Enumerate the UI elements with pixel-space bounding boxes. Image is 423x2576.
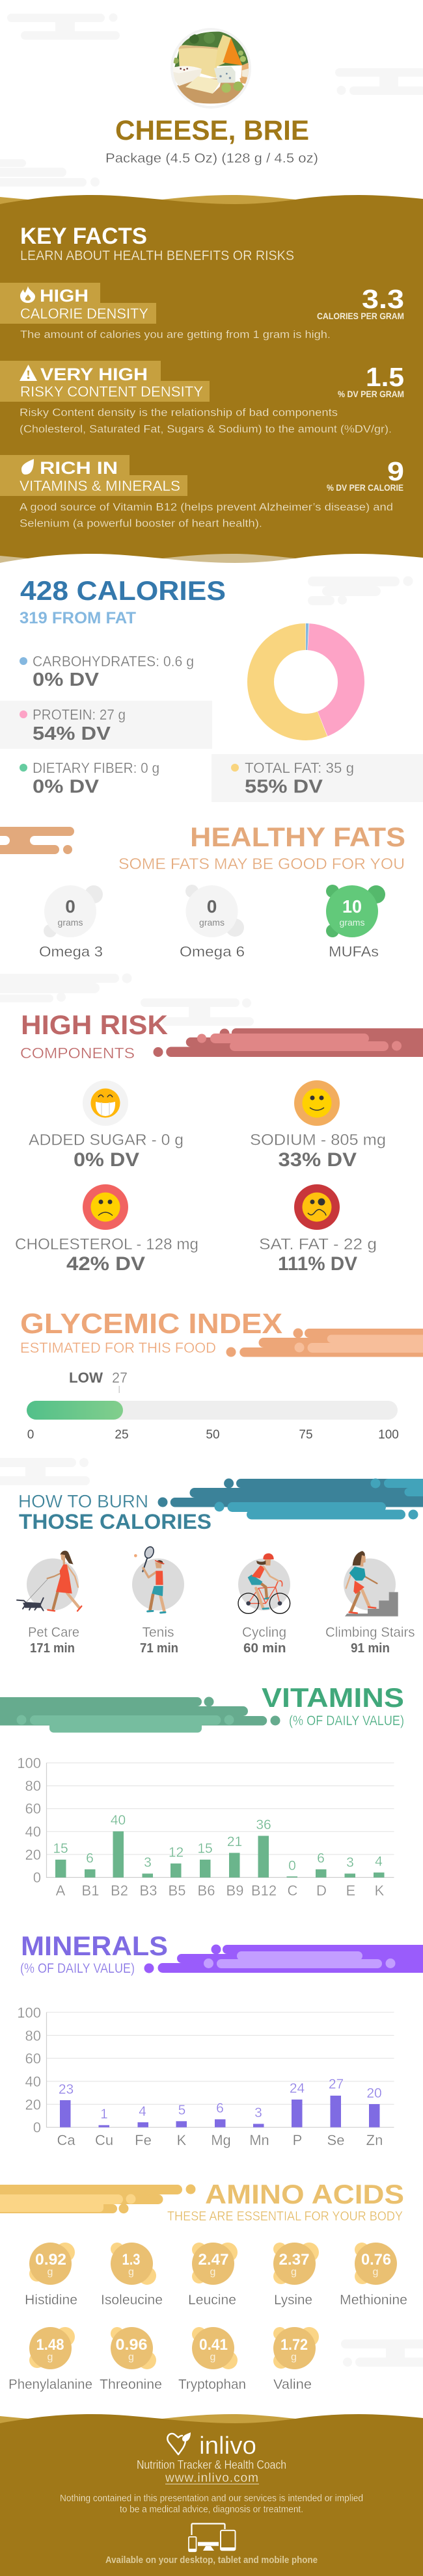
icon: flame	[20, 286, 35, 303]
amino: isoleucine	[101, 2243, 163, 2308]
amino: threonine: 0.96	[116, 2336, 147, 2354]
fact: vitamins and minerals	[0, 455, 404, 529]
fact: vitamins and minerals: RICH IN	[40, 458, 118, 478]
macro: total fat	[212, 754, 423, 802]
gauge scale labels: 0	[27, 1428, 34, 1442]
component: sodium: SODIUM - 805 mg	[250, 1131, 386, 1149]
food photo: cheese platter	[171, 28, 252, 111]
panel: key facts	[0, 195, 423, 572]
title: CHEESE, BRIE	[115, 115, 309, 146]
background cloud: amino	[341, 2339, 423, 2367]
amino: histidine: 0.92	[35, 2251, 66, 2269]
amino: phenylalanine: 1.48	[36, 2336, 64, 2354]
bar chart: vitamins: 60	[25, 1801, 41, 1817]
bar chart: vitamins: B3	[140, 1882, 157, 1899]
decoration: vitamins bars	[0, 1697, 280, 1733]
bar chart: minerals: Fe	[135, 2132, 152, 2148]
amino: valine: Valine	[273, 2377, 312, 2392]
amino: isoleucine: 1.3	[122, 2251, 141, 2269]
amino: lysine	[273, 2243, 319, 2308]
gauge value: low 27	[69, 1370, 128, 1393]
amino: leucine: 2.47	[198, 2251, 229, 2269]
amino: methionine: Methionine	[340, 2293, 407, 2308]
gauge value: low 27: 27	[112, 1370, 128, 1386]
activity: climbing stairs: Climbing Stairs	[325, 1625, 415, 1640]
bubble: MUFAs: 10	[342, 896, 362, 917]
fact: calorie density: CALORIES PER GRAM	[317, 311, 404, 321]
icon: leaf	[21, 459, 34, 475]
bar chart: minerals: 5	[178, 2103, 185, 2118]
macro: total fat: TOTAL FAT: 35 g	[245, 760, 354, 776]
macro: carbohydrates	[20, 653, 194, 690]
disclaimer	[60, 2493, 363, 2515]
bar chart: minerals: 4	[139, 2104, 146, 2119]
amino: valine: g	[291, 2352, 297, 2363]
bar chart: vitamins: 0	[288, 1858, 296, 1873]
decoration: amino bars	[0, 2184, 195, 2213]
decoration: burn bars	[157, 1478, 423, 1520]
bar chart: minerals: P	[293, 2132, 302, 2148]
fact: risky content density: 1.5	[366, 362, 404, 392]
subheading: vitamins: (% OF DAILY VALUE)	[289, 1713, 404, 1728]
subheading: healthy fats: SOME FATS MAY BE GOOD FOR YOU	[118, 855, 405, 873]
macro: protein: 54% DV	[33, 723, 111, 744]
panel: glycemic index	[20, 1308, 423, 1442]
component: added sugar	[29, 1080, 184, 1171]
amino: phenylalanine: g	[48, 2352, 53, 2363]
bubble: omega 6: 0	[207, 896, 217, 917]
heading: high risk: HIGH RISK	[21, 1009, 168, 1040]
amino: threonine: g	[128, 2352, 134, 2363]
fact: risky content density: Risky Content density is the relationship of bad components	[20, 407, 338, 419]
bubble: MUFAs	[326, 885, 385, 959]
amino: threonine: Threonine	[100, 2377, 162, 2392]
macro: protein: PROTEIN: 27 g	[33, 707, 126, 723]
bar chart: vitamins: 20	[25, 1847, 41, 1863]
disclaimer: Nothing contained in this presentation and our services is intended or implied	[60, 2493, 363, 2504]
decoration: healthy fats bars	[0, 827, 82, 854]
amino: histidine: g	[48, 2267, 53, 2278]
bar chart: minerals: 1	[100, 2107, 108, 2122]
subheading: minerals: (% OF DAILY VALUE)	[20, 1961, 135, 1976]
bar chart: vitamins: 12	[169, 1845, 184, 1860]
component: cholesterol: CHOLESTEROL - 128 mg	[15, 1236, 198, 1253]
amino: leucine	[188, 2243, 238, 2308]
bubble: omega 3: Omega 3	[39, 944, 103, 959]
subheading: components: COMPONENTS	[20, 1045, 135, 1061]
bubble: omega 3: 0	[65, 896, 75, 917]
bar chart: vitamins: 0	[33, 1869, 41, 1886]
bar chart: vitamins: 21	[227, 1834, 242, 1849]
bar chart: vitamins: 36	[256, 1817, 271, 1832]
component: cholesterol	[15, 1184, 198, 1275]
fact: risky content density: RISKY CONTENT DENSITY	[20, 384, 203, 400]
gauge scale labels	[27, 1428, 399, 1442]
activity: cycling	[238, 1554, 290, 1656]
bar chart: minerals: 23	[59, 2082, 74, 2097]
bar chart: minerals: 20	[366, 2086, 382, 2101]
bubble: omega 3	[39, 885, 103, 959]
bar chart: vitamins: 40	[111, 1813, 126, 1828]
activity: pet care	[17, 1551, 81, 1656]
bar chart: minerals: Mn	[249, 2132, 269, 2148]
bar chart: minerals: 40	[25, 2074, 41, 2090]
amino: lysine: 2.37	[279, 2251, 310, 2269]
bar chart: vitamins: 6	[317, 1851, 325, 1866]
amino: methionine	[340, 2243, 407, 2308]
amino: methionine: g	[373, 2267, 378, 2278]
component: cholesterol: 42% DV	[66, 1253, 145, 1275]
bar chart: minerals: Ca	[57, 2132, 75, 2148]
heading: glycemic index: GLYCEMIC INDEX	[20, 1308, 282, 1340]
macro: dietary fiber	[20, 760, 159, 797]
bubble: omega 3: grams	[58, 917, 83, 928]
bar chart: vitamins	[17, 1755, 394, 1899]
gauge scale labels: 25	[115, 1428, 129, 1442]
fact: risky content density: % DV PER GRAM	[338, 389, 404, 399]
amino: tryptophan: Tryptophan	[178, 2377, 246, 2392]
macro: dietary fiber: 0% DV	[33, 776, 100, 797]
heading: minerals: MINERALS	[21, 1931, 168, 1961]
amino: tryptophan	[178, 2327, 246, 2392]
gauge scale labels: 50	[206, 1428, 220, 1442]
website link: www.inlivo.com	[165, 2471, 258, 2485]
background cloud: top left	[7, 13, 120, 40]
component: sodium	[250, 1080, 386, 1171]
amino: isoleucine: Isoleucine	[101, 2293, 163, 2308]
icon: devices	[189, 2523, 236, 2552]
gauge value: low 27: LOW	[69, 1370, 103, 1386]
macro: carbohydrates: CARBOHYDRATES: 0.6 g	[33, 653, 194, 670]
heading: healthy fats: HEALTHY FATS	[190, 822, 405, 852]
disclaimer: to be a medical advice, diagnosis or treatment.	[120, 2504, 303, 2515]
fact: calorie density: CALORIE DENSITY	[20, 306, 148, 322]
bar chart: minerals: 80	[25, 2028, 41, 2044]
component: added sugar: ADDED SUGAR - 0 g	[29, 1131, 184, 1149]
bubble: omega 6	[180, 885, 245, 959]
tagline: Nutrition Tracker & Health Coach	[137, 2458, 286, 2471]
bar chart: minerals: 20	[25, 2097, 41, 2113]
bar chart: vitamins: C	[288, 1882, 298, 1899]
bar chart: vitamins: B1	[82, 1882, 99, 1899]
fact: calorie density: HIGH	[40, 286, 89, 306]
bar chart: vitamins: 100	[17, 1755, 41, 1771]
bar chart: vitamins: B9	[226, 1882, 243, 1899]
fact: risky content density	[0, 361, 404, 436]
amino: leucine: g	[210, 2267, 215, 2278]
amino: phenylalanine	[8, 2327, 92, 2392]
component: saturated fat	[259, 1184, 377, 1275]
amino: tryptophan: 0.41	[199, 2336, 228, 2354]
subheading: glycemic index: ESTIMATED FOR THIS FOOD	[20, 1340, 216, 1356]
amino: methionine: 0.76	[361, 2251, 391, 2269]
amino: histidine	[25, 2243, 77, 2308]
activity: climbing stairs	[325, 1551, 415, 1656]
fact: calorie density: 3.3	[362, 284, 404, 314]
bar chart: minerals: 60	[25, 2050, 41, 2067]
macro: total fat: 55% DV	[245, 776, 323, 797]
panel: vitamins	[0, 1682, 404, 1899]
bar chart: vitamins: B2	[111, 1882, 128, 1899]
activity: pet care: 171 min	[30, 1641, 75, 1656]
heading: vitamins: VITAMINS	[262, 1682, 404, 1713]
bubble: omega 6: Omega 6	[180, 944, 245, 959]
component: saturated fat: 111% DV	[278, 1253, 357, 1275]
decoration: glycemic bars	[226, 1329, 423, 1357]
bar chart: vitamins: 15	[53, 1841, 68, 1856]
amino: lysine: g	[291, 2267, 297, 2278]
bar chart: vitamins: 80	[25, 1778, 41, 1794]
activity: cycling: 60 min	[243, 1641, 286, 1656]
bar chart: vitamins: 15	[197, 1841, 213, 1856]
background cloud: calories	[308, 576, 413, 605]
component: sodium: 33% DV	[279, 1149, 357, 1171]
decoration: minerals bars	[144, 1945, 423, 1973]
heading: key facts: KEY FACTS	[20, 224, 147, 249]
gauge scale labels: 100	[378, 1428, 399, 1442]
amino: tryptophan: g	[210, 2352, 215, 2363]
donut chart	[247, 623, 364, 740]
fact: vitamins and minerals: % DV PER CALORIE	[327, 482, 403, 493]
bar chart: vitamins: 6	[86, 1851, 94, 1866]
gauge bar	[27, 1401, 398, 1420]
macro: dietary fiber: DIETARY FIBER: 0 g	[33, 760, 159, 776]
panel: amino acids	[0, 2179, 423, 2392]
bar chart: vitamins: D	[316, 1882, 327, 1899]
heading: calories: 428 CALORIES	[20, 575, 226, 606]
subheading: amino acids: THESE ARE ESSENTIAL FOR YOUR BODY	[167, 2209, 403, 2224]
amino: lysine: Lysine	[274, 2293, 312, 2308]
fact: vitamins and minerals: Selenium (a powerful booster of heart health).	[20, 517, 262, 529]
logo: inlivo wordmark: inlivo	[199, 2432, 256, 2460]
panel: healthy fats	[0, 822, 405, 959]
bar chart: vitamins: K	[375, 1882, 385, 1899]
subheading: key facts: LEARN ABOUT HEALTH BENEFITS OR RISKS	[20, 248, 294, 263]
fact: calorie density	[0, 283, 404, 341]
bar chart: minerals: Cu	[95, 2132, 113, 2148]
background cloud: burn	[0, 1458, 90, 1485]
fact: risky content density: VERY HIGH	[40, 365, 148, 384]
amino: threonine	[100, 2327, 162, 2392]
bar chart: vitamins: 3	[346, 1855, 354, 1870]
bar chart: vitamins: B6	[198, 1882, 215, 1899]
background cloud: left of title	[0, 159, 100, 187]
amino: phenylalanine: Phenylalanine	[8, 2377, 92, 2392]
activity: tennis: 71 min	[140, 1641, 178, 1656]
bar chart: vitamins: 3	[144, 1855, 152, 1870]
activity: pet care: Pet Care	[28, 1625, 79, 1640]
background cloud: right	[141, 998, 254, 1026]
bar chart: minerals: 0	[33, 2119, 41, 2136]
panel: high risk components	[0, 974, 423, 1275]
bar chart: minerals: Mg	[211, 2132, 231, 2148]
fact: risky content density: (Cholesterol, Saturated Fat, Sugars & Sodium) to the amount (%DV/gr).	[20, 424, 392, 436]
bar chart: vitamins: E	[346, 1882, 355, 1899]
macro: carbohydrates: 0% DV	[33, 670, 100, 690]
bar chart: minerals: 24	[290, 2081, 305, 2096]
amino: isoleucine: g	[128, 2267, 134, 2278]
amino: histidine: Histidine	[25, 2293, 77, 2308]
macro: protein	[0, 701, 212, 749]
availability note: Available on your desktop, tablet and mobile phone	[105, 2555, 318, 2566]
bar chart: minerals: 6	[216, 2101, 224, 2116]
bar chart: minerals: K	[177, 2132, 187, 2148]
heading: those calories: THOSE CALORIES	[19, 1510, 212, 1533]
bar chart: minerals: Zn	[366, 2132, 383, 2148]
fact: calorie density: The amount of calories you are getting from 1 gram is high.	[20, 329, 331, 341]
bar chart: minerals	[17, 2005, 394, 2148]
bubble: MUFAs: MUFAs	[329, 944, 379, 959]
panel: how to burn those calories	[0, 1458, 423, 1656]
icon: warning triangle	[20, 365, 37, 381]
bar chart: minerals: 3	[254, 2105, 262, 2120]
subheading: calories from fat: 319 FROM FAT	[20, 609, 136, 627]
activity: cycling: Cycling	[242, 1625, 286, 1640]
heading: how to burn: HOW TO BURN	[18, 1491, 148, 1511]
bubble: MUFAs: grams	[340, 917, 364, 928]
activity: tennis: Tenis	[142, 1625, 174, 1640]
bar chart: minerals: 27	[329, 2077, 344, 2092]
activity: tennis	[132, 1546, 184, 1656]
amino: leucine: Leucine	[188, 2293, 236, 2308]
bubble: omega 6: grams	[199, 917, 225, 928]
panel: footer	[0, 2414, 423, 2576]
bar chart: minerals: Se	[327, 2132, 344, 2148]
gauge scale labels: 75	[299, 1428, 313, 1442]
panel: calories	[0, 575, 423, 802]
amino: valine	[273, 2327, 319, 2392]
bar chart: vitamins: B5	[169, 1882, 185, 1899]
fact: vitamins and minerals: VITAMINS & MINERALS	[20, 478, 180, 494]
wave top of key facts	[0, 195, 423, 566]
component: added sugar: 0% DV	[74, 1149, 139, 1171]
heading: amino acids: AMINO ACIDS	[205, 2179, 404, 2209]
panel: minerals	[17, 1931, 423, 2148]
amino: valine: 1.72	[280, 2336, 308, 2354]
serving size: Package (4.5 Oz) (128 g / 4.5 oz)	[105, 151, 318, 166]
fact: vitamins and minerals: 9	[387, 456, 404, 486]
background cloud: left	[0, 974, 131, 1002]
bar chart: vitamins: 40	[25, 1824, 41, 1840]
decoration: high risk bars	[154, 1028, 423, 1057]
bar chart: vitamins: B12	[251, 1882, 277, 1899]
bar chart: vitamins: A	[56, 1882, 66, 1899]
logo: heart and leaf	[167, 2432, 191, 2454]
bar chart: vitamins: 4	[375, 1854, 383, 1869]
background cloud: top right	[335, 68, 423, 95]
wave top of footer	[0, 2414, 423, 2576]
fact: vitamins and minerals: A good source of Vitamin B12 (helps prevent Alzheimer’s disease) and	[20, 502, 393, 514]
wave bottom of key facts	[0, 554, 423, 572]
component: saturated fat: SAT. FAT - 22 g	[259, 1236, 377, 1253]
activity: climbing stairs: 91 min	[351, 1641, 390, 1656]
bar chart: minerals: 100	[17, 2005, 41, 2021]
